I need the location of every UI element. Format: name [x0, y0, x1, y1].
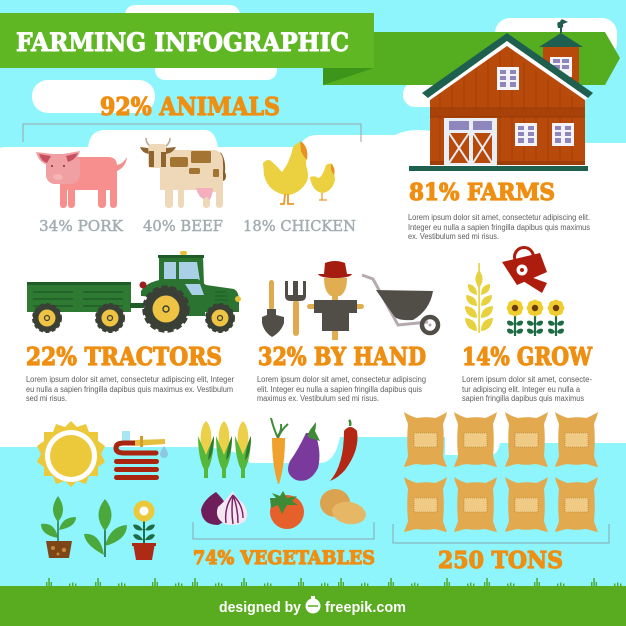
text: tractors description: eu nulla a sapien fringilla dapibus quis maximus ex. Vestibulum — [26, 385, 233, 394]
label: 34% pork: 34% PORK — [39, 217, 124, 235]
icon: scarecrow — [307, 261, 364, 340]
label: 18% chicken: 18% CHICKEN — [243, 217, 356, 235]
barn wall — [430, 45, 585, 165]
trailer wheel front — [33, 304, 61, 332]
icon: potted plant — [41, 496, 76, 558]
trailer — [27, 282, 144, 312]
barn ground — [409, 166, 588, 171]
green banner — [0, 13, 620, 85]
white middle band with cloud edges — [0, 130, 626, 463]
text: by hand description: Lorem ipsum dolor sit amet, consectetur adipiscing — [257, 375, 426, 384]
icon: corn 1 — [198, 421, 214, 478]
barn roof — [422, 33, 593, 98]
icon: garden fork — [285, 281, 306, 336]
icon: carrot — [271, 418, 288, 484]
icon: pig — [36, 151, 127, 208]
tractor body — [141, 279, 239, 316]
title: FARMING INFOGRAPHIC — [16, 28, 349, 57]
footer credit: designed by — [219, 600, 301, 616]
text: by hand description: elit. Integer eu nulla a sapien fringilla dapibus quis — [257, 385, 422, 394]
icon: sunflower 2 — [527, 300, 543, 336]
icon: eggplant — [288, 422, 320, 481]
sack row 1 col 3 — [505, 412, 548, 467]
sack row 2 col 3 — [505, 477, 548, 532]
banner fold — [323, 68, 374, 85]
barn window: left — [515, 123, 537, 146]
text: grow description: sapien fringilla dapibus quis maximus — [462, 394, 584, 403]
icon: wheelbarrow — [362, 275, 438, 333]
tractor rear wheel — [144, 287, 188, 331]
icon: potatoes — [320, 489, 368, 527]
icon: chickens — [263, 141, 335, 204]
icon: tomato — [270, 491, 304, 529]
sack row 1 col 4 — [555, 412, 598, 467]
icon: seedling — [84, 499, 127, 557]
footer credit — [219, 596, 406, 616]
barn cupola — [539, 19, 583, 96]
grass tufts — [46, 578, 621, 586]
icon: shovel — [262, 280, 284, 337]
icon: wheat — [465, 263, 493, 333]
sack row 2 col 4 — [555, 477, 598, 532]
sack row 2 col 1 — [404, 477, 447, 532]
text: grow description: Lorem ipsum dolor sit amet, consecte- — [462, 375, 592, 384]
icon: onion — [201, 491, 247, 525]
text: by hand description: maximus ex. Vestibulum sed mi risus. — [257, 394, 379, 403]
heading: 81% farms: 81% FARMS — [409, 179, 555, 206]
text: grow description: tur adipiscing elit. Integer eu nulla a — [462, 385, 581, 394]
heading: 92% animals: 92% ANIMALS — [100, 92, 280, 121]
tractor cab — [158, 251, 204, 285]
icon: potted flower — [132, 500, 156, 560]
bracket: animals — [23, 124, 361, 142]
trailer wheel rear — [96, 304, 124, 332]
text: farms description — [408, 213, 590, 241]
text: tractors description: sed mi risus. — [26, 394, 67, 403]
text: farms description: Integer eu nulla a sapien fringilla dapibus quis maximus — [408, 223, 590, 232]
heading: 14% grow: 14% GROW — [462, 342, 592, 371]
icon: corn 2 — [216, 421, 232, 478]
icon: chili — [330, 420, 358, 481]
footer credit: freepik.com — [325, 600, 406, 616]
heading: 32% by hand: 32% BY HAND — [258, 342, 426, 371]
banner front — [0, 13, 374, 68]
text: tractors description: Lorem ipsum dolor sit amet, consectetur adipiscing elit, Integer — [26, 375, 234, 384]
heading: 250 tons: 250 TONS — [438, 547, 563, 574]
sack row 1 col 1 — [404, 412, 447, 467]
text: by hand description — [257, 375, 426, 403]
clouds — [32, 5, 617, 113]
bracket: tons — [393, 524, 609, 543]
icon: tractor with trailer — [27, 251, 241, 332]
heading: 74% vegetables: 74% VEGETABLES — [193, 547, 375, 569]
text: farms description: ex. Vestibulum sed mi risus. — [408, 232, 499, 241]
sack row 2 col 2 — [454, 477, 497, 532]
bracket: vegetables — [193, 522, 374, 539]
sacks grid — [404, 412, 598, 532]
icon: sunflower 3 — [548, 300, 564, 336]
sack row 1 col 2 — [454, 412, 497, 467]
footer ground — [0, 586, 626, 626]
heading: 22% tractors: 22% TRACTORS — [26, 342, 222, 371]
icon: sun — [37, 421, 105, 487]
banner back tail — [323, 32, 620, 85]
barn window: top — [497, 67, 519, 90]
icon: sunflower 1 — [507, 300, 523, 336]
text: grow description — [462, 375, 592, 403]
barn window: right — [552, 123, 574, 146]
icon: barn — [409, 19, 593, 171]
icon: hose — [114, 431, 168, 480]
text: tractors description — [26, 375, 234, 403]
barn door — [444, 118, 497, 165]
icon: watering can — [502, 248, 547, 293]
tractor front wheel — [206, 304, 234, 332]
icon: corn 3 — [235, 421, 251, 478]
icon: cow — [140, 138, 226, 208]
text: farms description: Lorem ipsum dolor sit amet, consectetur adipiscing elit. — [408, 213, 590, 222]
label: 40% beef: 40% BEEF — [143, 217, 223, 235]
